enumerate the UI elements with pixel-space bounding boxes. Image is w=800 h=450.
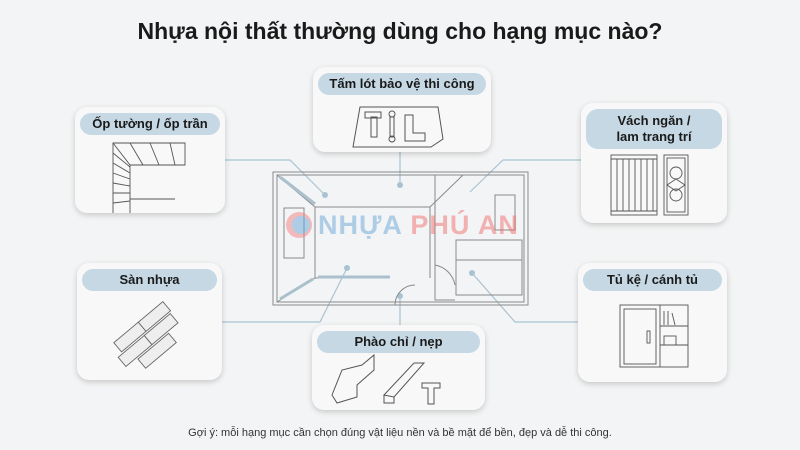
card: Sàn nhựa <box>77 263 222 380</box>
card: Tấm lót bảo vệ thi công: Tấm lót bảo vệ thi công <box>329 76 475 91</box>
card: Phào chỉ / nẹp: Phào chỉ / nẹp <box>354 334 443 349</box>
card: Tủ kệ / cánh tủ: Tủ kệ / cánh tủ <box>607 272 698 287</box>
card: Tủ kệ / cánh tủ <box>578 263 727 382</box>
card: Tấm lót bảo vệ thi công <box>313 67 491 152</box>
card: Phào chỉ / nẹp <box>312 325 485 410</box>
logo watermark: NHỰA PHÚ AN <box>318 210 519 240</box>
card: Vách ngăn / lam trang trí: lam trang trí <box>616 129 692 144</box>
card: Sàn nhựa: Sàn nhựa <box>120 272 179 287</box>
card: Vách ngăn / lam trang trí <box>581 103 727 223</box>
footer note: Gợi ý: mỗi hạng mục cần chọn đúng vật liệu nền và bề mặt để bền, đẹp và dễ thi công. <box>188 427 612 439</box>
card: Ốp tường <box>75 107 225 213</box>
title: Nhựa nội thất thường dùng cho hạng mục nào? <box>138 18 662 44</box>
card: Ốp tường: Ốp tường / ốp trần <box>92 116 208 131</box>
card: Vách ngăn / lam trang trí: Vách ngăn / <box>618 113 690 128</box>
